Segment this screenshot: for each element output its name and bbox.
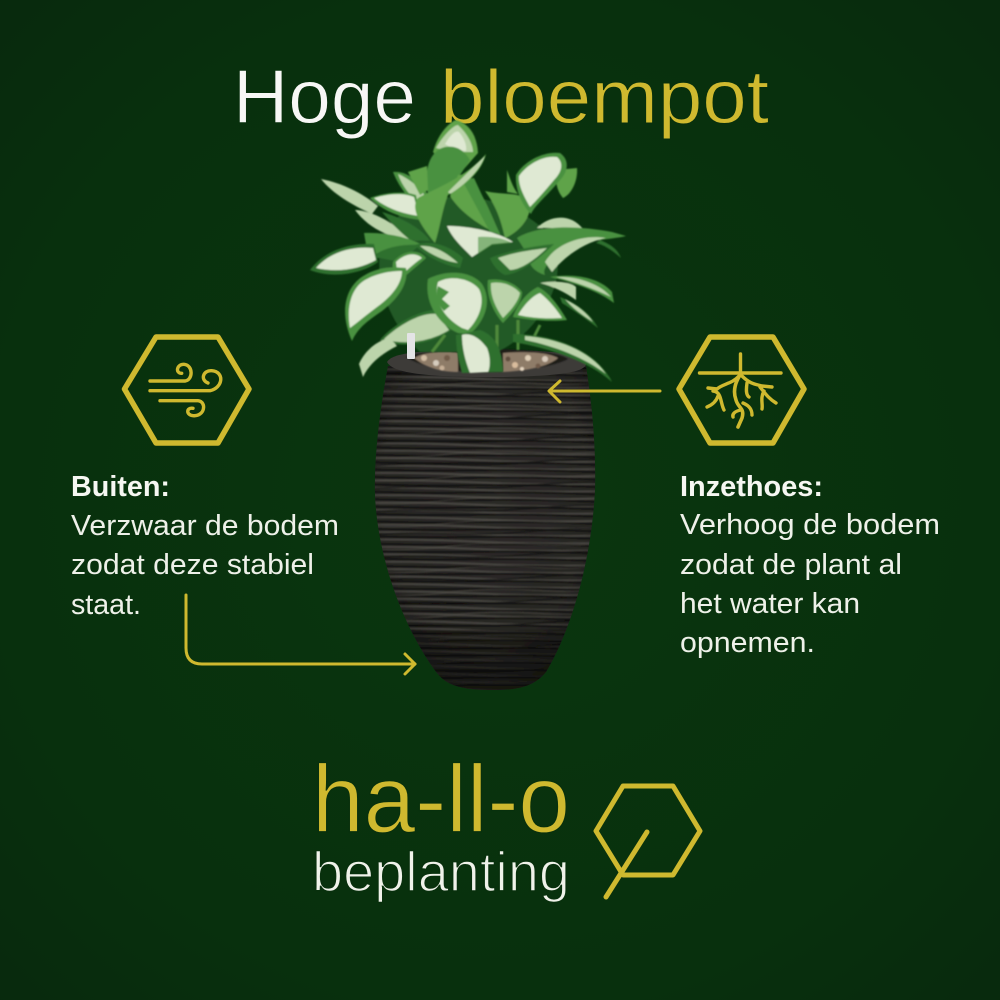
text block: Buiten: staat. — [71, 589, 141, 621]
logo hexagon mark — [596, 786, 700, 897]
left arrow pointing at the pot base — [186, 595, 415, 674]
text block: Buiten: zodat deze stabiel — [71, 549, 314, 581]
plant — [310, 120, 626, 382]
bottom right trailing leaf — [513, 334, 612, 382]
gravel soil — [406, 349, 568, 372]
centre big leaf — [427, 273, 487, 334]
low leaf — [380, 310, 451, 345]
pot rim — [387, 350, 586, 377]
text block: Buiten: Verzwaar de bodem — [71, 510, 339, 542]
flower pot — [365, 349, 605, 695]
back leaves — [433, 120, 478, 178]
foliage mass — [379, 197, 558, 352]
big left leaf — [345, 267, 406, 341]
icon: roots in hexagon — [679, 337, 804, 443]
text block: Buiten: Buiten: — [71, 471, 170, 503]
title: bloempot — [440, 55, 769, 140]
right lower leaves — [550, 276, 614, 303]
right arrow pointing at the pot — [549, 381, 660, 402]
title: Hoge — [233, 55, 416, 140]
logo wordmark: ha-ll-o — [312, 746, 570, 853]
left pale leaf — [310, 244, 378, 275]
text block: Inzethoes: Inzethoes: — [680, 471, 823, 503]
text block: Inzethoes — [680, 471, 940, 659]
pale centre leaves — [447, 226, 513, 257]
upper centre green leaf — [415, 154, 486, 243]
logo — [312, 746, 700, 903]
bottom centre leaf — [456, 330, 503, 373]
text block: Inzethoes: het water kan — [680, 588, 860, 620]
logo tagline: beplanting — [312, 840, 570, 903]
leaf above big left — [393, 252, 426, 284]
text block: Inzethoes: opnemen. — [680, 627, 815, 659]
text block: Buiten — [71, 471, 339, 621]
text block: Inzethoes: Verhoog de bodem — [680, 509, 940, 541]
icon: wind in hexagon — [124, 337, 249, 443]
title — [233, 55, 769, 140]
right spreading leaves — [537, 218, 583, 229]
text block: Inzethoes: zodat de plant al — [680, 549, 902, 581]
stems — [432, 320, 540, 358]
right of centre leaves — [488, 280, 522, 323]
moisture meter — [407, 333, 415, 359]
